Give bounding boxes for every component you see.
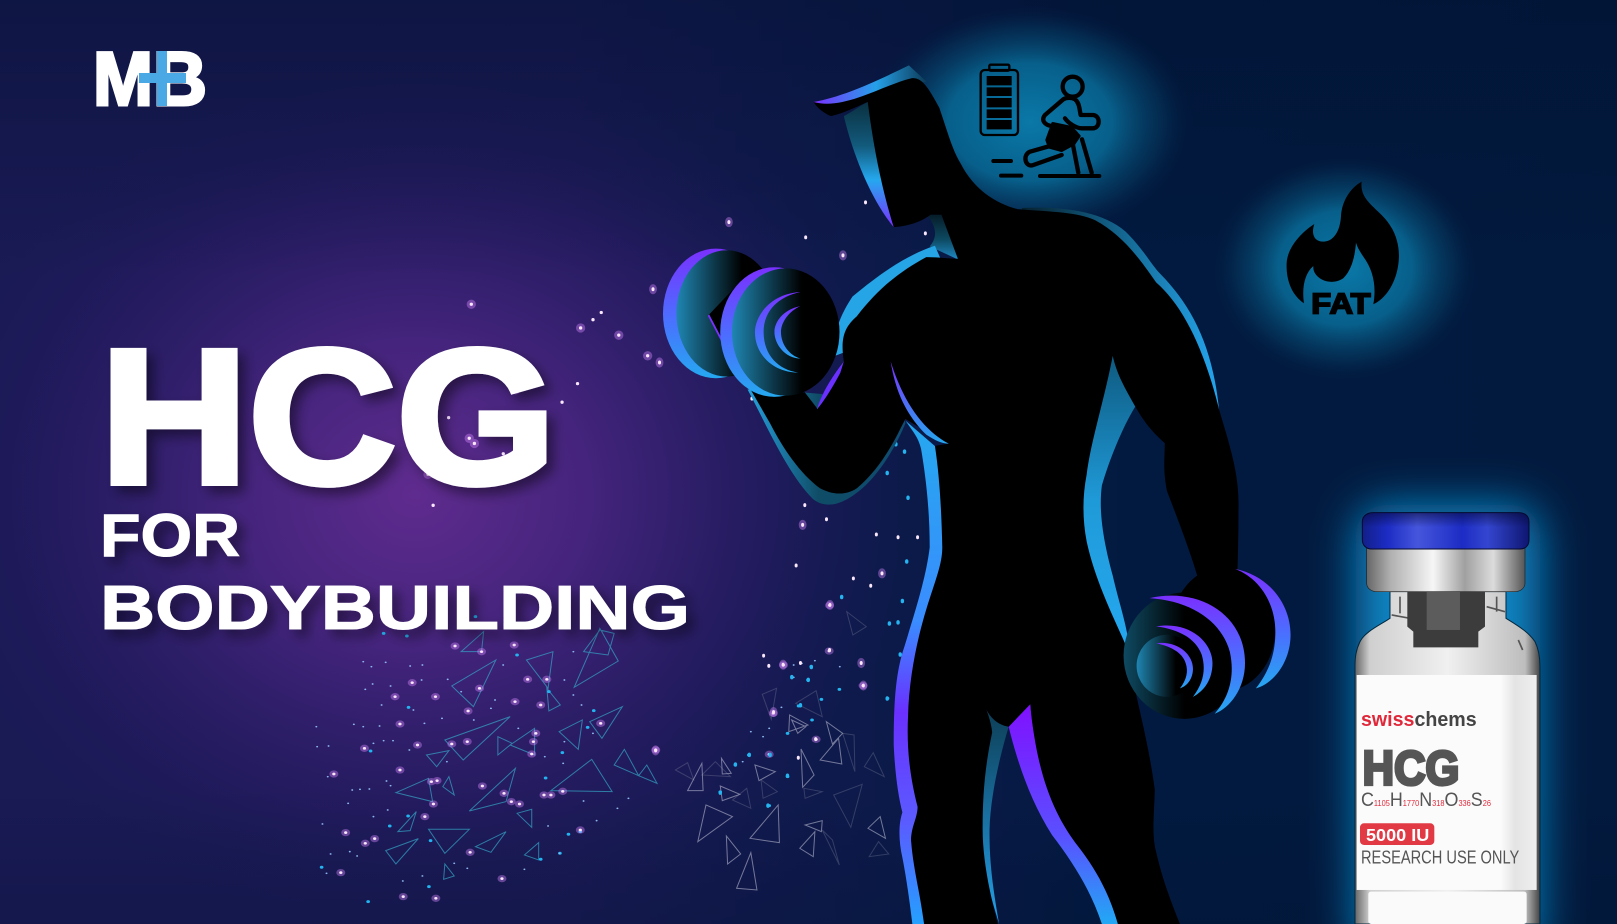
body silhouette xyxy=(751,78,1239,924)
icon: fat flame: FAT xyxy=(1311,288,1371,320)
logo: M+B xyxy=(93,37,207,122)
particles near title xyxy=(418,304,648,505)
label text: brand: swisschems xyxy=(1361,709,1477,731)
figure: bodybuilder silhouette xyxy=(663,65,1291,924)
heading: BODYBUILDING: BODYBUILDING xyxy=(100,574,690,643)
powder xyxy=(1368,892,1527,924)
label text: HCG: HCG xyxy=(1363,742,1459,796)
particles and triangles xyxy=(316,202,925,902)
vial glass body xyxy=(1355,592,1540,924)
icon: fat flame xyxy=(1287,182,1399,320)
lower particle field xyxy=(316,605,889,902)
heading: FOR: FOR xyxy=(100,502,240,569)
label text: formula: C1105H1770N318O336S26 xyxy=(1361,790,1491,811)
label text: research use only: RESEARCH USE ONLY xyxy=(1361,846,1520,867)
vial stopper xyxy=(1407,592,1485,647)
label badge: 5000 IU: 5000 IU xyxy=(1366,825,1429,845)
vial: HCG xyxy=(1355,513,1540,924)
heading: HCG: HCG xyxy=(100,309,556,524)
rim lights behind body xyxy=(748,65,1219,924)
vial cap xyxy=(1362,513,1529,549)
vial glass streaks xyxy=(1392,597,1523,650)
icon: battery xyxy=(981,65,1018,135)
logo: M+B: M xyxy=(93,37,153,122)
logo: M+B: B xyxy=(153,37,207,122)
upper particle field xyxy=(653,202,925,806)
icon: battery and runner xyxy=(981,65,1099,176)
crescent highlights on body xyxy=(817,102,949,444)
left dumbbell xyxy=(663,249,840,397)
vial cap crimp xyxy=(1367,548,1525,592)
vial label xyxy=(1357,675,1537,890)
right dumbbell xyxy=(1124,567,1291,719)
icon: runner xyxy=(993,77,1099,176)
title xyxy=(100,309,690,643)
